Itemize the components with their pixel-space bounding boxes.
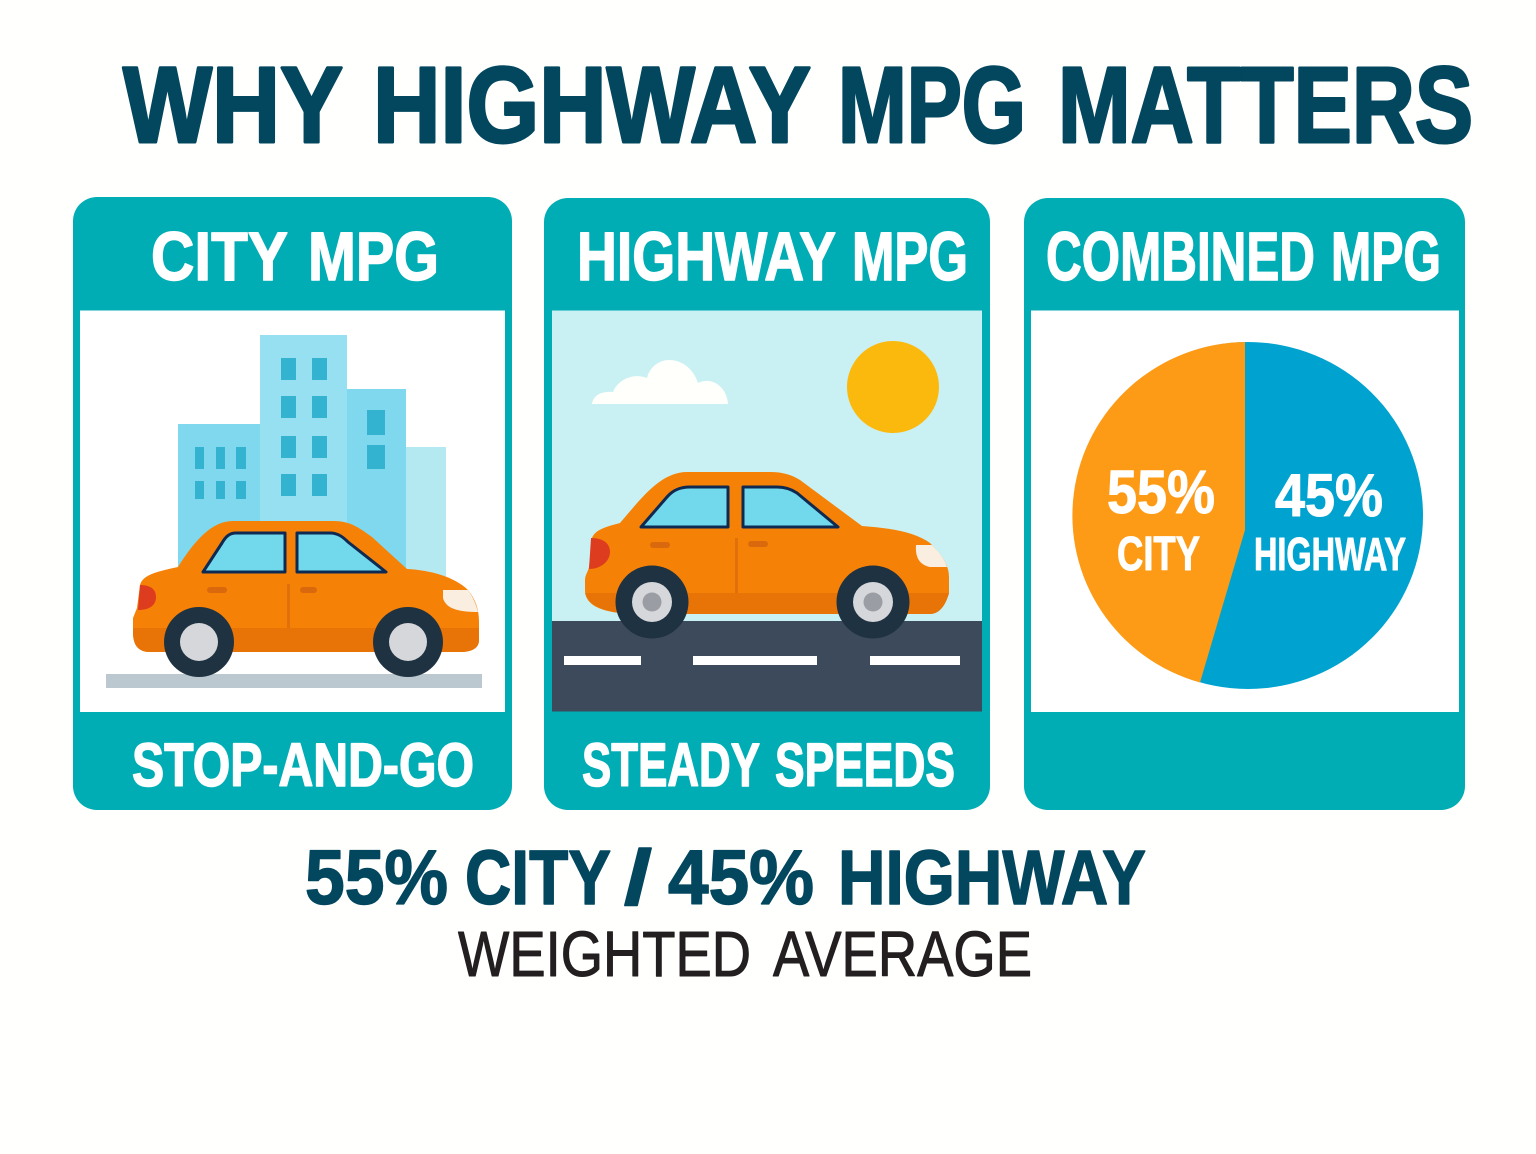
car: city: [133, 521, 479, 677]
heading: combined mpg: COMBINED: [1046, 218, 1315, 295]
panel: city mpg: [73, 197, 512, 810]
summary ratio: HIGHWAY: [838, 835, 1146, 921]
panel: combined mpg: [1024, 198, 1465, 810]
highway illustration: [552, 310, 982, 712]
car: highway: [585, 472, 949, 638]
summary ratio: /: [624, 835, 652, 921]
heading: combined mpg: MPG: [1331, 218, 1441, 295]
heading: highway mpg: MPG: [852, 218, 968, 295]
ground strip: [106, 674, 482, 688]
summary ratio: 55%: [305, 835, 448, 921]
summary ratio: CITY: [465, 835, 611, 921]
heading: highway mpg: HIGHWAY: [577, 218, 836, 295]
buildings: [178, 335, 446, 577]
heading: city mpg: MPG: [308, 218, 439, 295]
label: 45% highway: HIGHWAY: [1254, 528, 1406, 580]
title: WHY: [123, 44, 343, 165]
city illustration: [80, 310, 505, 712]
title: MPG: [838, 44, 1026, 165]
heading: city mpg: CITY: [151, 218, 288, 295]
pie chart: [1072, 342, 1423, 689]
label: 45% highway: 45%: [1275, 462, 1383, 529]
caption: steady speeds: STEADY: [582, 731, 760, 799]
panel: highway mpg: [544, 198, 990, 810]
caption: stop-and-go: STOP-AND-GO: [132, 731, 474, 799]
cloud: [592, 360, 728, 404]
label: 55% city: CITY: [1117, 528, 1200, 581]
title: [123, 44, 1473, 165]
subheading: weighted average: AVERAGE: [773, 918, 1032, 990]
title: HIGHWAY: [373, 44, 811, 165]
heading: city mpg: [151, 218, 439, 295]
caption: steady speeds: SPEEDS: [775, 731, 955, 799]
subheading: weighted average: [458, 918, 1032, 990]
summary ratio: [305, 835, 1146, 921]
label: 45% highway: [1254, 462, 1406, 580]
sun: [847, 341, 939, 433]
label: 55% city: [1107, 458, 1215, 581]
road: [552, 621, 982, 712]
caption: steady speeds: [582, 731, 955, 799]
label: 55% city: 55%: [1107, 458, 1215, 526]
subheading: weighted average: WEIGHTED: [458, 918, 751, 990]
summary ratio: 45%: [668, 835, 814, 921]
